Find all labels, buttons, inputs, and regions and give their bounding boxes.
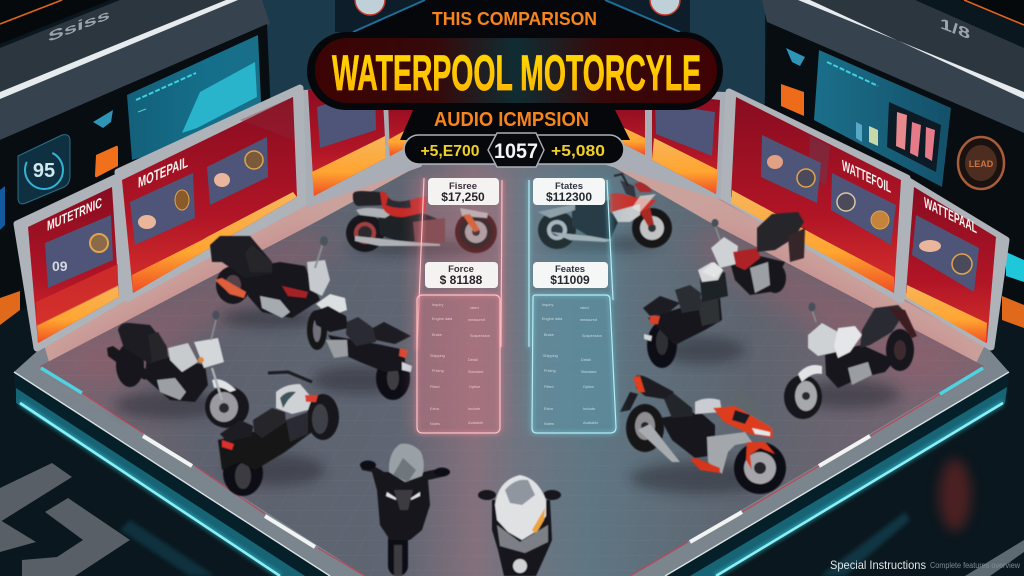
screen: blue chart xyxy=(814,50,951,187)
card: material comparison xyxy=(45,215,113,288)
motorcycle: front dark naked xyxy=(360,444,450,576)
panel: left red board 2 xyxy=(118,88,303,298)
spec list: blue: Shipping xyxy=(543,354,558,358)
spec list: blue: measured xyxy=(580,318,597,322)
spec list: blue: Brake xyxy=(544,333,554,337)
spec list: pink: Option xyxy=(469,385,480,389)
spec list: pink: Include xyxy=(468,407,480,411)
price strip: centre number xyxy=(488,133,544,167)
panel: left red board 1 xyxy=(17,178,125,348)
gauge: speed dial xyxy=(18,135,70,204)
card: material comparison xyxy=(912,215,979,292)
price strip: right value: +5,080 xyxy=(551,143,605,160)
spec list: blue: Available xyxy=(583,421,598,425)
price label: blue top: $112300 xyxy=(546,190,592,204)
spec list: pink: Brake xyxy=(432,333,442,337)
price label: pink lower: Force xyxy=(448,264,474,275)
motorcycle: right sport red grey xyxy=(620,375,786,494)
spec list: pink xyxy=(430,303,490,426)
card: material comparison xyxy=(831,173,896,245)
spec list: blue: Notes xyxy=(544,422,554,426)
price label: blue lower: $11009 xyxy=(550,273,590,287)
subtitle: AUDIO ICMPSION xyxy=(434,109,589,131)
heading: board label: WATTEPAAL xyxy=(924,195,977,237)
floor xyxy=(40,165,984,576)
heading: board label: WATTEFOIL xyxy=(842,158,891,197)
wall label: 1/8 xyxy=(940,15,971,43)
right wall ceiling xyxy=(762,0,1024,133)
motorcycle: left bottom white tank xyxy=(218,372,339,496)
spec list: pink: Extra xyxy=(430,407,440,411)
spec list: pink: Suspension xyxy=(470,334,490,338)
price label: blue top: Ftates xyxy=(555,181,583,192)
panel: right red board A xyxy=(724,92,907,300)
column: pink comparison xyxy=(410,178,510,433)
spec list: pink: Inquiry xyxy=(432,303,443,307)
platform side bands xyxy=(14,372,1009,576)
back right panels behind title xyxy=(606,88,726,200)
chart: three bars xyxy=(887,102,941,172)
spec list: blue: Include xyxy=(583,407,595,411)
spec list: blue: Option xyxy=(583,385,594,389)
motorcycle: centre right dark xyxy=(643,262,728,368)
spec list: pink: Fitted xyxy=(430,385,440,389)
price strip: centre number: 1057 xyxy=(494,140,538,163)
panel: right red board B xyxy=(901,180,1006,347)
spec list: blue: Engine data xyxy=(542,317,563,321)
icon: seal emblem xyxy=(958,137,1004,189)
gauge: speed dial: 95 xyxy=(33,160,55,182)
motorcycle: centre left dark xyxy=(307,294,412,400)
spec list: pink: Available xyxy=(468,421,483,425)
footer note xyxy=(830,558,1020,572)
spec list: blue: Detail xyxy=(581,358,591,362)
spec list: pink: rated xyxy=(470,306,479,310)
column: blue comparison xyxy=(522,178,620,433)
spec list: blue xyxy=(542,303,602,426)
title: main heading: WATERPOOL MOTORCYLE xyxy=(332,45,701,101)
price label: blue top xyxy=(533,178,605,205)
spec list: pink: Notes xyxy=(430,422,440,426)
title: kicker: THIS COMPARISON xyxy=(432,8,597,29)
price label: pink top: $17,250 xyxy=(441,190,485,204)
spec list: pink: Engine data xyxy=(432,317,453,321)
spec list: pink: Pricing xyxy=(432,369,444,373)
price strip: left value: +5,E700 xyxy=(420,143,480,160)
card: material comparison: 09 xyxy=(52,258,68,274)
icon: seal emblem: LEAD xyxy=(969,159,994,169)
motorcycle: left front cruiser xyxy=(107,310,249,428)
price label: pink top xyxy=(428,178,499,205)
motorcycle: front white fairing xyxy=(478,475,561,576)
motorcycle: top right red xyxy=(538,174,672,249)
motorcycle: top left red xyxy=(346,191,497,253)
heading: board label: MUTETRNIC xyxy=(47,195,102,235)
card: material comparison xyxy=(761,135,821,203)
spec list: blue: rated xyxy=(580,306,589,310)
heading: board label: MOTEPAIL xyxy=(138,154,188,192)
motorcycle: right cruiser xyxy=(784,302,917,419)
spec list: blue: Extra xyxy=(544,407,554,411)
platform rim xyxy=(14,140,1009,576)
price label: pink top: Fisree xyxy=(449,181,477,192)
screen: blue schematic xyxy=(127,35,262,160)
bottom right reflection xyxy=(120,459,1024,576)
motorcycle: back right cruiser xyxy=(702,212,805,295)
price label: blue lower xyxy=(533,262,608,288)
price label: pink lower xyxy=(425,262,498,288)
spec list: blue: Inquiry xyxy=(542,303,553,307)
bottom left logo floor graphic xyxy=(0,463,130,576)
price strip xyxy=(404,133,624,167)
spec list: pink: Standard xyxy=(468,370,483,374)
bike shadows xyxy=(115,237,900,494)
footer note: Special Instructions xyxy=(830,558,926,572)
motorcycle: left back cruiser xyxy=(210,236,330,318)
spec list: pink: Detail xyxy=(468,358,478,362)
title plate xyxy=(307,0,723,167)
top header screens xyxy=(335,0,690,32)
floor boundary markers xyxy=(41,368,983,576)
spec list: pink: Shipping xyxy=(430,354,445,358)
left wall screens xyxy=(0,24,275,325)
icon: orange warning tile xyxy=(95,146,118,177)
card: material comparison xyxy=(207,137,268,205)
spec list: blue: Suspension xyxy=(582,334,602,338)
left wall ceiling xyxy=(0,0,270,140)
wall label: Ssiss xyxy=(48,7,110,46)
back left panels behind title xyxy=(302,80,420,205)
card: material comparison xyxy=(130,173,195,245)
spec list: blue: Standard xyxy=(581,370,596,374)
right wall screens xyxy=(762,22,1024,328)
price label: blue lower: Feates xyxy=(555,264,585,275)
spec list: blue: Fitted xyxy=(544,385,554,389)
icon: orange tile xyxy=(781,84,804,116)
icon: cyan badge xyxy=(93,110,113,128)
icon: cyan badge xyxy=(786,48,805,66)
spec list: blue: Pricing xyxy=(544,369,556,373)
price label: pink lower: $ 81188 xyxy=(440,273,483,287)
spec list: pink: measured xyxy=(468,318,485,322)
